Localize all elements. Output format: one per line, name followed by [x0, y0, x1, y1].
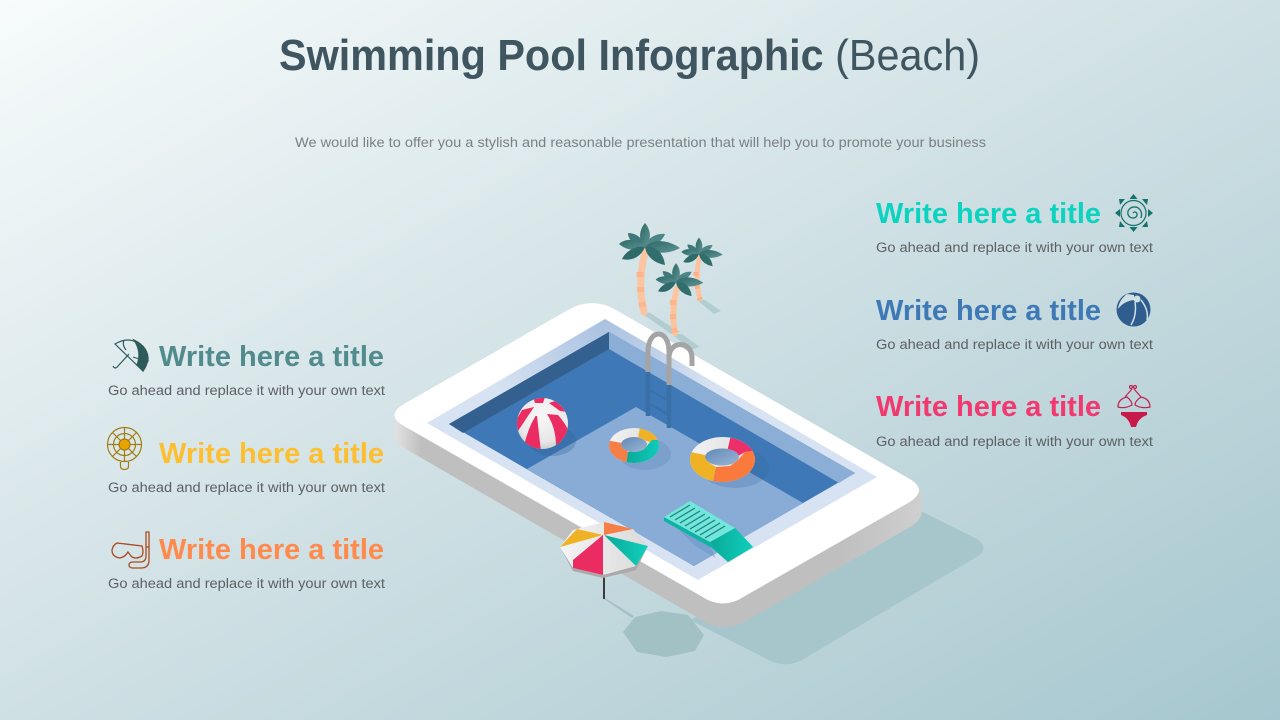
- pool right wall: [609, 332, 855, 483]
- pool illustration: [394, 223, 984, 664]
- pool side wall: [395, 416, 922, 627]
- large swim ring: [690, 437, 762, 488]
- left item 2: [108, 428, 385, 495]
- icon: bikini: [1118, 386, 1150, 427]
- description: Go ahead and replace it with your own text: [876, 434, 1153, 449]
- ladder: [648, 334, 692, 428]
- pool deck: [394, 303, 919, 604]
- umbrella shadow: [604, 598, 704, 657]
- small swim ring: [609, 428, 671, 470]
- title: Write here a title: [159, 341, 384, 373]
- description: Go ahead and replace it with your own text: [108, 383, 385, 398]
- title: Swimming Pool Infographic (Beach): [279, 31, 980, 80]
- icon: sun: [1115, 194, 1153, 232]
- description: Go ahead and replace it with your own text: [108, 480, 385, 495]
- deck chair: [664, 501, 753, 562]
- description: Go ahead and replace it with your own text: [876, 240, 1153, 255]
- icon: ball: [1116, 292, 1150, 326]
- icon: snorkel: [112, 532, 149, 568]
- left item 3: [108, 532, 385, 591]
- pool left wall: [449, 332, 609, 433]
- right item 2: [876, 292, 1153, 352]
- description: Go ahead and replace it with your own text: [108, 576, 385, 591]
- pool floor shallow: [527, 407, 803, 566]
- left item 1: [108, 340, 385, 398]
- description: Go ahead and replace it with your own text: [876, 337, 1153, 352]
- beach ball: [514, 397, 576, 456]
- title: Write here a title: [159, 534, 384, 566]
- palm tree shadows: [640, 300, 721, 350]
- icon: fan: [108, 428, 142, 470]
- title: Write here a title: [876, 295, 1101, 327]
- title: Write here a title: [159, 438, 384, 470]
- right item 1: [876, 194, 1153, 255]
- pool floor deep: [449, 332, 855, 566]
- icon: umbrella: [113, 340, 148, 371]
- pool ground shadow: [690, 508, 984, 664]
- right item 3: [876, 386, 1153, 449]
- title: Write here a title: [876, 391, 1101, 423]
- palm trees: [619, 223, 723, 335]
- subtitle: We would like to offer you a stylish and reasonable presentation that will help you to promote your business: [295, 134, 986, 150]
- beach umbrella: [560, 522, 648, 599]
- title: Write here a title: [876, 198, 1101, 230]
- inner lip: [427, 319, 877, 580]
